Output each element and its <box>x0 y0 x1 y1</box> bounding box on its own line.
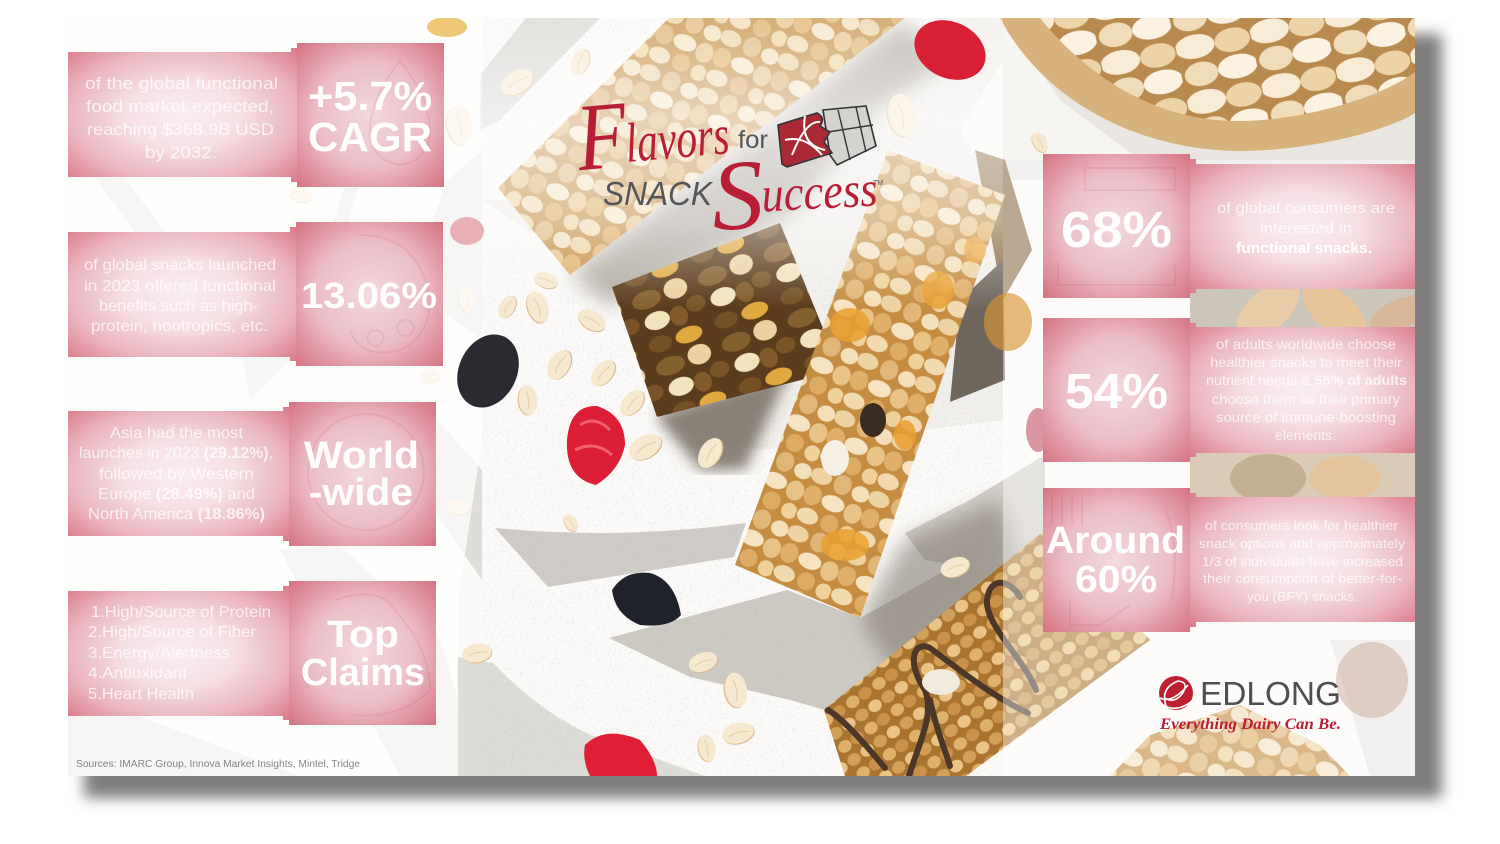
icon: faint head watermark <box>335 594 430 716</box>
title word: SNACK: SNACK <box>603 175 714 212</box>
dark granola bar <box>612 223 840 417</box>
text: regional launches: Asia had the most <box>110 425 244 442</box>
main granola bar <box>735 150 1005 618</box>
shadows beneath bars <box>655 370 790 470</box>
title word: Success: S <box>709 138 766 252</box>
washed raspberry <box>450 217 484 245</box>
text: regional launches <box>79 425 273 523</box>
icon: chocolate bar <box>778 106 876 167</box>
text: adults choosing healthier snacks: nutrient needs & 56% of adults <box>1206 372 1407 388</box>
list: top claims: 1.High/Source of Protein <box>91 604 271 621</box>
icon: faint drop watermark <box>370 60 430 165</box>
stat: Around 60% <box>1046 520 1185 601</box>
text: adults choosing healthier snacks: elements. <box>1275 427 1336 443</box>
stat: +5.7% CAGR: +5.7% <box>308 73 432 119</box>
text: better-for-you snacks: of consumers look for healthier <box>1205 518 1399 533</box>
apricot piece <box>984 293 1032 351</box>
panel: Around 60% <box>1043 488 1415 632</box>
text: regional launches: launches in 2023 (29.12%), <box>79 445 273 462</box>
stat: 68%: 68% <box>1061 201 1172 258</box>
text: better-for-you snacks: their consumption of better-for- <box>1203 571 1402 586</box>
tagline: Everything Dairy Can Be. <box>1159 716 1341 733</box>
icon: faint globe watermark <box>308 414 424 530</box>
icon: faint cutlery watermark <box>1052 495 1175 625</box>
list: top claims: 4.Antioxidant <box>88 665 188 682</box>
icon: faint package watermark <box>1058 168 1175 285</box>
list: top claims: 2.High/Source of Fiber <box>88 624 257 641</box>
text: better-for-you snacks <box>1199 518 1406 604</box>
grey speckled surface zones <box>458 18 1415 776</box>
list: top claims <box>88 604 271 703</box>
raisin left <box>457 334 519 408</box>
text: functional snack interest: functional snacks. <box>1236 240 1372 257</box>
text: functional snack interest <box>1217 200 1395 257</box>
text: regional launches: Europe (28.49%) and <box>98 486 255 503</box>
stat: +5.7% CAGR: CAGR <box>308 114 432 160</box>
stat: World-wide: World <box>304 435 419 477</box>
text: better-for-you snacks: 1/3 of individuals have increased <box>1202 554 1403 569</box>
icon: faint bowl watermark <box>350 235 429 352</box>
stat: Around 60%: Around <box>1046 520 1185 562</box>
text: CAGR description: by 2032. <box>145 143 217 162</box>
stat: +5.7% CAGR <box>308 73 432 160</box>
shadow under top bar <box>570 20 945 305</box>
almonds <box>1190 289 1415 497</box>
text: adults choosing healthier snacks: source of immune-boosting <box>1216 409 1396 425</box>
text: adults choosing healthier snacks <box>1206 336 1407 443</box>
text: functional snack launches: of global snacks launched <box>84 257 276 274</box>
logo: Edlong <box>1159 675 1341 733</box>
text: functional snack launches: benefits such as high- <box>99 298 258 315</box>
bar behind main bar <box>950 150 1032 402</box>
cranberry piece <box>1026 408 1043 452</box>
raspberry top <box>914 20 986 80</box>
text: CAGR description: food market expected, <box>86 97 274 116</box>
panel: 54% <box>1043 318 1415 462</box>
text: functional snack launches: protein, nootropics, etc. <box>91 318 268 335</box>
bottom chocolate bar <box>824 530 1150 776</box>
apricot top left <box>427 17 467 37</box>
text: regional launches: North America (18.86%) <box>88 506 265 523</box>
wash: left side <box>68 18 482 776</box>
wash: right side <box>1003 160 1415 776</box>
icon: Edlong globe <box>1159 676 1193 710</box>
text: adults choosing healthier snacks: of adults worldwide choose <box>1216 336 1396 352</box>
title word: Flavors: F <box>571 80 632 191</box>
left pale grey shapes <box>446 290 482 580</box>
stat: Top Claims: Claims <box>301 652 425 694</box>
title word: Flavors <box>571 71 733 191</box>
panel: 68% <box>1043 154 1415 298</box>
text: adults choosing healthier snacks: choose them as their primary <box>1212 391 1400 407</box>
text: functional snack launches <box>84 257 276 335</box>
scattered oats <box>286 46 1051 763</box>
text: better-for-you snacks: snack options and approximately <box>1199 536 1406 551</box>
list: top claims: 3.Energy/Alertness <box>88 645 230 662</box>
stat: 13.06%: 13.06% <box>301 275 437 316</box>
text: adults choosing healthier snacks: healthier snacks to meet their <box>1210 354 1402 370</box>
text: CAGR description: of the global functional <box>85 74 278 93</box>
text: CAGR description <box>85 74 278 162</box>
stat: World-wide: -wide <box>309 472 413 514</box>
title word: Success <box>709 132 880 252</box>
panel: Top Claims <box>68 581 436 725</box>
title: Flavors for Snack Success <box>571 71 883 252</box>
raspberry bottom <box>584 734 657 776</box>
sources note: Sources: IMARC Group, Innova Market Insights, Mintel, Tridge <box>76 759 360 770</box>
raspberry centre <box>567 406 625 485</box>
panel: 13.06% <box>68 222 443 366</box>
title word: Flavors: lavors <box>623 104 732 175</box>
wordmark: EDLONG: EDLONG <box>1200 675 1341 712</box>
stat: Top Claims: Top <box>327 614 399 656</box>
trademark: TM <box>873 180 883 187</box>
stat: 54%: 54% <box>1065 365 1168 419</box>
text: functional snack launches: in 2023 offered functional <box>84 278 276 295</box>
wash: top centre <box>482 18 1003 308</box>
stat: Around 60%: 60% <box>1075 559 1157 601</box>
text: CAGR description: reaching $368.9B USD <box>87 120 274 139</box>
bottom-right pale granola <box>1110 642 1408 776</box>
raisin bottom <box>612 573 681 626</box>
title word: Success: uccess <box>760 160 879 222</box>
text: regional launches: followed by Western <box>99 466 254 483</box>
stat: Top Claims <box>301 614 425 694</box>
panel: World-wide <box>68 402 436 546</box>
top-left granola bar <box>498 18 905 275</box>
text: functional snack interest: of global consumers are <box>1217 200 1395 217</box>
text: functional snack interest: interested in <box>1260 220 1352 237</box>
text: better-for-you snacks: you (BFY) snacks. <box>1247 589 1358 604</box>
list: top claims: 5.Heart Health <box>88 686 194 703</box>
title word: for: for <box>738 126 768 154</box>
stat: World-wide <box>304 435 419 514</box>
panel: CAGR <box>68 43 444 187</box>
wooden bowl of oats <box>1000 18 1415 151</box>
